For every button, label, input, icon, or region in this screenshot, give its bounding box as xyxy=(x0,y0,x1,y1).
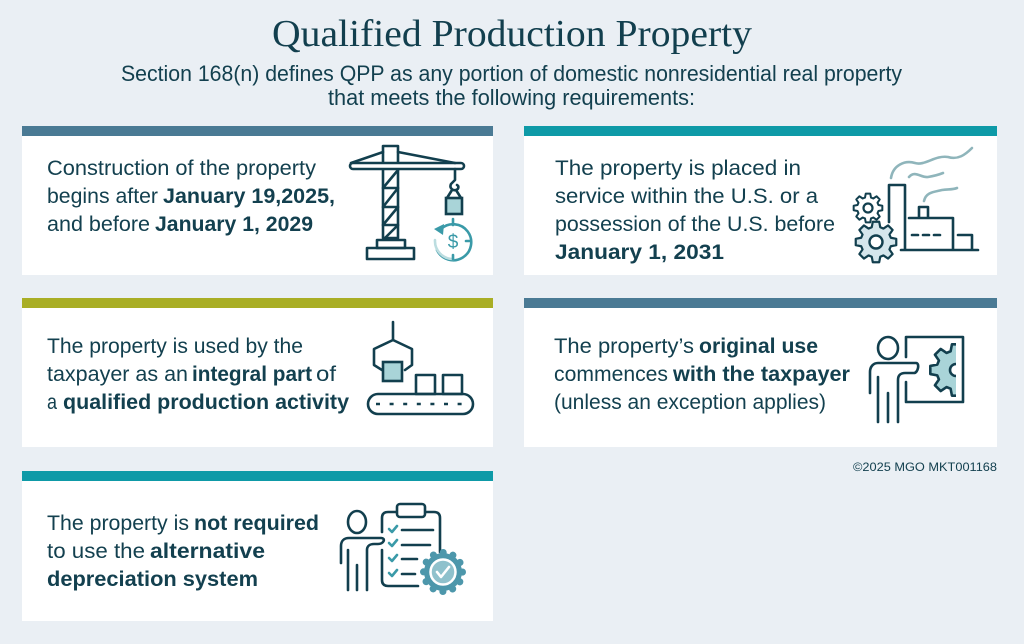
panel: integral part xyxy=(22,298,493,447)
subtitle: Section 168(n) defines QPP as any portion of domestic nonresidential real property xyxy=(121,61,902,86)
text: service location and date: possession of the U.S. before xyxy=(555,213,835,236)
text: original use xyxy=(554,335,850,414)
text: production activity: qualified production activity xyxy=(63,391,349,414)
copyright note: ©2025 MGO MKT001168 xyxy=(853,460,997,474)
text: construction dates xyxy=(47,157,335,236)
text: alternative depreciation: not required xyxy=(194,512,319,535)
text: construction dates: and before xyxy=(47,213,150,236)
icon: person presenting gear xyxy=(868,336,964,424)
text: service location and date: service within the U.S. or a xyxy=(555,185,818,208)
panel: original use xyxy=(524,298,997,447)
text: original use: The property’s xyxy=(554,335,694,358)
text: production activity: of xyxy=(316,363,336,386)
subtitle xyxy=(121,61,902,110)
text: original use: (unless an exception applies) xyxy=(554,391,826,414)
icon: crane with dollar cycle: $ xyxy=(448,232,459,253)
icon: crane with dollar cycle xyxy=(350,146,471,260)
text: production activity xyxy=(47,335,349,414)
text: alternative depreciation xyxy=(47,512,319,591)
icon: person with checklist and badge xyxy=(341,504,462,592)
text: construction dates: Construction of the property xyxy=(47,157,317,180)
text: original use: original use xyxy=(699,335,818,358)
panel: depreciation system xyxy=(22,471,493,621)
text: service location and date xyxy=(555,157,835,264)
text: production activity: The property is used by the xyxy=(47,335,303,358)
text: alternative depreciation: The property is xyxy=(47,512,189,535)
text: construction dates: January 1, 2029 xyxy=(155,213,313,236)
text: original use: commences xyxy=(554,363,668,386)
subtitle: that meets the following requirements: xyxy=(328,85,695,110)
text: alternative depreciation: alternative xyxy=(150,540,265,563)
text: production activity: taxpayer as an xyxy=(47,363,188,386)
icon: factory with gears xyxy=(854,148,978,262)
text: production activity: a xyxy=(47,391,57,414)
text: construction dates: January 19,2025, xyxy=(163,185,335,208)
text: alternative depreciation: to use the xyxy=(47,540,145,563)
panel: construction timing xyxy=(22,126,493,275)
text: alternative depreciation: depreciation system xyxy=(47,568,258,591)
text: production activity: integral part xyxy=(192,363,312,386)
text: construction dates: begins after xyxy=(47,185,158,208)
text: original use: with the taxpayer xyxy=(672,363,850,386)
title: Qualified Production Property xyxy=(272,13,752,55)
text: service location and date: The property is placed in xyxy=(555,157,801,180)
icon: conveyor belt xyxy=(368,322,473,414)
text: service location and date: January 1, 2031 xyxy=(555,241,724,264)
panel: placed in service xyxy=(524,126,997,275)
